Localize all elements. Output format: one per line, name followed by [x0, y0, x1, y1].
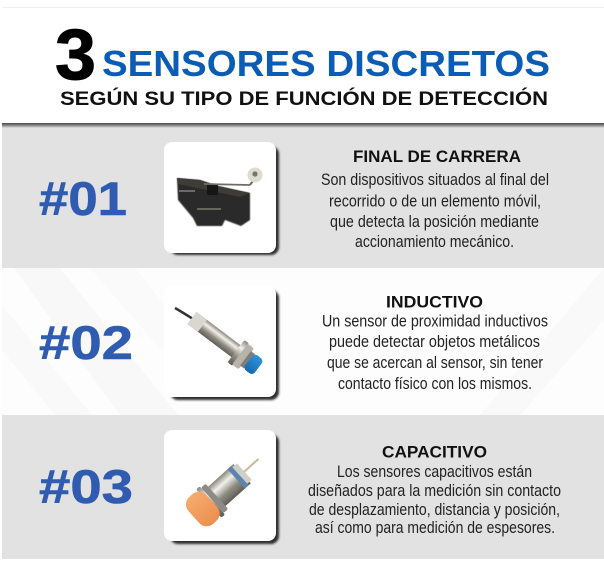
description: Son dispositivos situados al final del — [321, 170, 549, 189]
description: que se acercan al sensor, sin tener — [327, 353, 543, 372]
description: Un sensor de proximidad inductivos — [322, 312, 548, 330]
card with capacitive sensor photo — [164, 430, 279, 544]
description: accionamiento mecánico. — [355, 232, 514, 251]
panel: capacitivo — [2, 415, 604, 559]
description — [321, 170, 549, 251]
header — [55, 16, 550, 110]
description: que detecta la posición mediante — [330, 212, 539, 231]
panel: final de carrera — [2, 123, 604, 268]
icon: inductive sensor — [175, 307, 267, 379]
number #02: #02 — [39, 316, 133, 369]
heading: final de carrera: FINAL DE CARRERA — [353, 147, 521, 166]
title number 3: 3 — [55, 16, 96, 95]
description: diseñados para la medición sin contacto — [308, 481, 561, 500]
heading: inductivo: INDUCTIVO — [386, 292, 483, 312]
title: sensores discretos: SENSORES DISCRETOS — [102, 43, 550, 84]
heading: capacitivo: CAPACITIVO — [382, 442, 487, 462]
panel: inductivo — [2, 268, 604, 415]
icon: capacitive sensor — [181, 445, 271, 531]
description — [308, 462, 561, 537]
card with inductive sensor photo — [164, 286, 279, 400]
description: puede detectar objetos metálicos — [329, 332, 540, 351]
description: contacto físico con los mismos. — [338, 374, 532, 393]
subtitle: SEGÚN SU TIPO DE FUNCIÓN DE DETECCIÓN — [60, 86, 548, 110]
number #01: #01 — [39, 172, 127, 225]
description: así como para medición de espesores. — [315, 518, 555, 537]
description — [322, 312, 548, 393]
description: recorrido o de un elemento móvil, — [329, 192, 541, 210]
description: Los sensores capacitivos están — [337, 462, 532, 481]
icon: limit switch — [177, 168, 262, 226]
number #03: #03 — [39, 460, 133, 513]
card with limit switch photo — [164, 142, 279, 255]
